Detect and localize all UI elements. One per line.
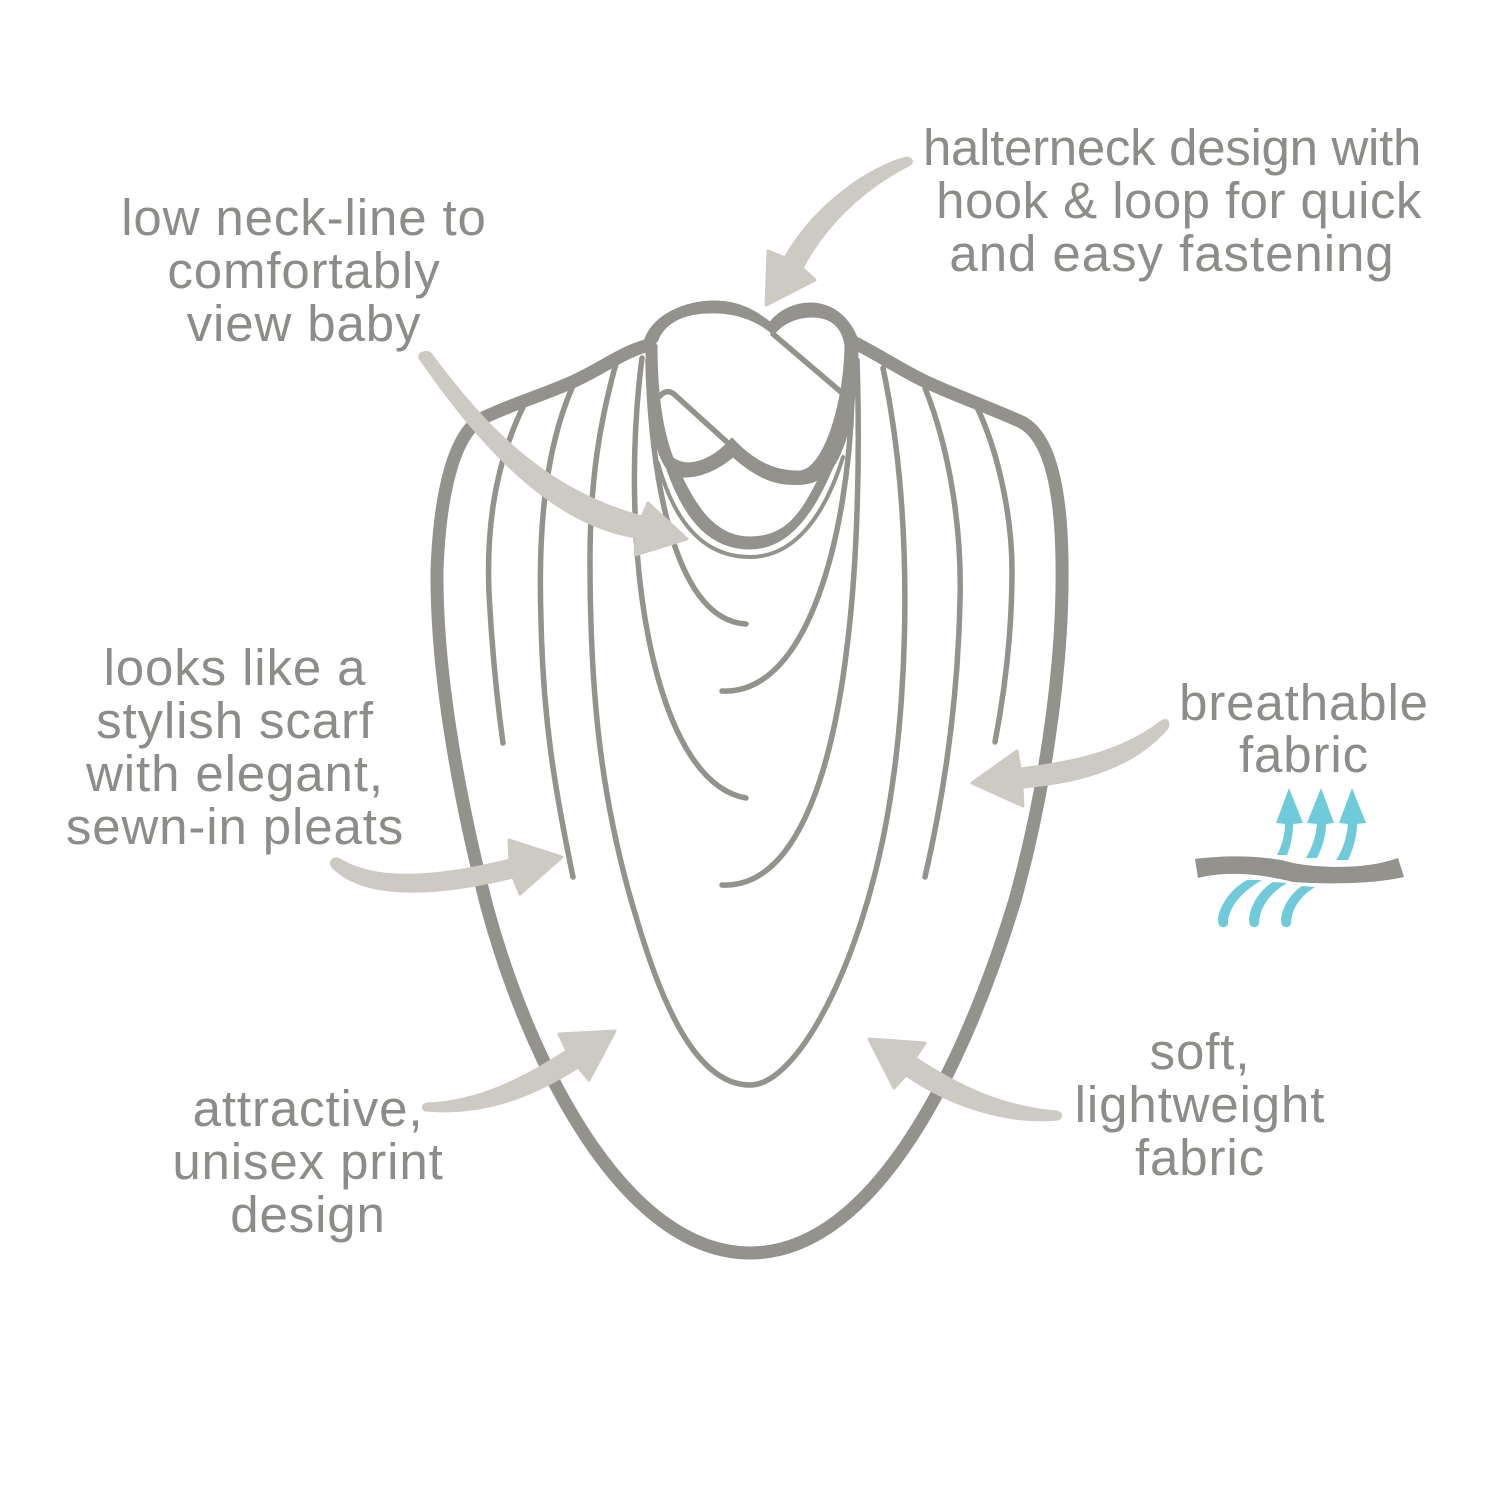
neck loop left [643,301,775,345]
text: print: design [230,1186,386,1243]
arrow: scarf pleats [332,840,562,894]
scarf outer outline [437,342,1062,1253]
upper blue arrows [1276,788,1366,860]
text: breathable: breathable [1179,674,1429,731]
diagonal strap left [660,392,728,443]
neck loop right [770,303,858,345]
text: breathable: fabric [1239,726,1369,783]
outer thin U neckline [658,457,843,557]
scarf illustration [437,301,1062,1253]
arrow: print design [423,1031,615,1111]
text: scarf: with elegant, [85,745,384,802]
text: scarf: looks like a [104,639,366,696]
text: scarf: sewn-in pleats [66,798,404,855]
icon: breathable fabric [1195,788,1404,927]
text: halterneck: halterneck design with [923,119,1421,176]
arrow: halterneck [766,158,911,305]
arrow: low neck-line [420,352,687,555]
text: soft: soft, [1150,1023,1250,1080]
diagonal strap right [773,334,841,392]
text: scarf: stylish scarf [96,692,374,749]
text: low neck-line: low neck-line to [121,189,487,246]
text: halterneck: and easy fastening [949,225,1395,282]
lower blue curves [1218,880,1315,927]
pleat lines [489,358,1012,1085]
text: print: unisex print [172,1133,444,1190]
text: soft: lightweight [1075,1076,1325,1133]
neckline sides and scallop [646,343,858,485]
text: low neck-line: comfortably [167,242,441,299]
text: soft: fabric [1135,1129,1265,1186]
arrow: breathable fabric [972,720,1168,806]
fabric band [1195,856,1404,883]
arrow: lightweight fabric [869,1039,1061,1120]
text: low neck-line: view baby [187,295,421,352]
inner U neckline [667,467,833,549]
text: print: attractive, [193,1080,423,1137]
text: halterneck: hook & loop for quick [936,172,1422,229]
